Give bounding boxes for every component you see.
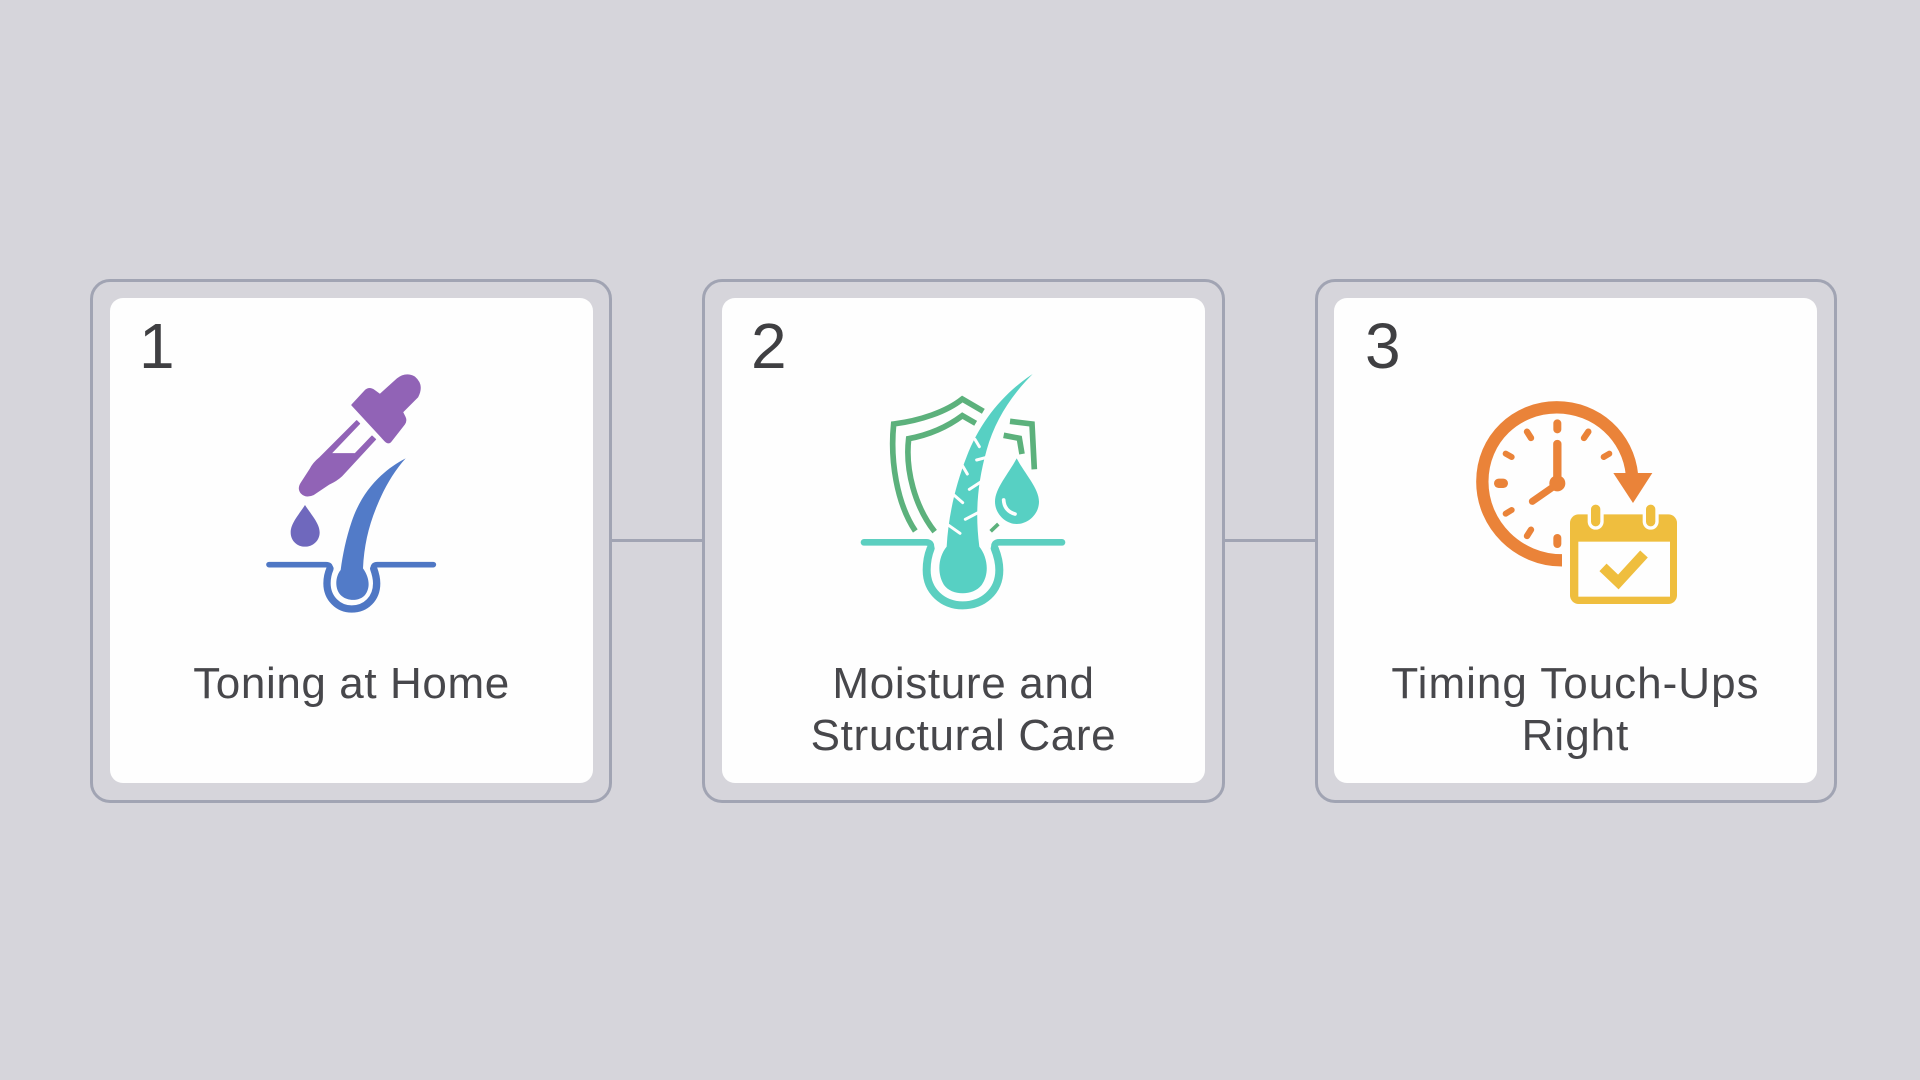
skin line with follicle — [269, 565, 330, 569]
skin line right — [994, 542, 1062, 548]
label: timing touch-ups right — [1391, 659, 1760, 760]
connector 1 to 2 — [611, 539, 703, 542]
card 1 — [110, 298, 593, 783]
skin line left — [864, 542, 931, 548]
calendar page — [1578, 542, 1670, 597]
hair strand with bulb — [939, 374, 1033, 593]
icon: clock with arrow and calendar — [1482, 407, 1677, 604]
label: timing touch-ups right: Right — [1522, 711, 1629, 760]
dropper bulb — [352, 375, 420, 442]
drop highlight — [1004, 500, 1015, 514]
follicle cup — [327, 569, 377, 609]
step number 3: 3 — [1365, 310, 1401, 382]
clock hands — [1532, 444, 1561, 501]
panel: step 2 moisture and structural care — [702, 279, 1225, 803]
icon: dropper over hair follicle — [269, 375, 433, 609]
white halo around strand — [947, 374, 1033, 540]
icon: shield, hair strand and moisture drop — [864, 374, 1062, 605]
white halo around drop — [991, 452, 1043, 528]
dropper tube — [299, 421, 376, 496]
step number 1: 1 — [139, 310, 175, 382]
label: moisture and structural care — [811, 659, 1116, 760]
falling drop — [291, 505, 320, 547]
clock arc — [1482, 407, 1632, 560]
panel: step 3 timing touch-ups right — [1315, 279, 1837, 803]
shield outline — [893, 399, 1034, 532]
calendar checkmark — [1603, 554, 1644, 582]
arrow head — [1613, 473, 1652, 503]
card 3 — [1334, 298, 1817, 783]
calendar rings — [1596, 509, 1651, 522]
panel: step 1 toning at home — [90, 279, 612, 803]
step number 2: 2 — [751, 310, 787, 382]
skin line right — [373, 565, 433, 569]
follicle cup — [927, 548, 999, 605]
label: toning at home: Toning at Home — [193, 659, 510, 708]
clock ticks — [1499, 423, 1609, 544]
connector 2 to 3 — [1224, 539, 1316, 542]
label: timing touch-ups right: Timing Touch-Ups — [1391, 659, 1760, 708]
moisture drop — [995, 458, 1039, 524]
calendar body — [1570, 514, 1677, 604]
cuticle marks — [949, 439, 987, 533]
card 2 — [722, 298, 1205, 783]
hair strand — [336, 458, 406, 600]
label: moisture and structural care: Structural Care — [811, 711, 1116, 760]
label: moisture and structural care: Moisture and — [832, 659, 1095, 708]
